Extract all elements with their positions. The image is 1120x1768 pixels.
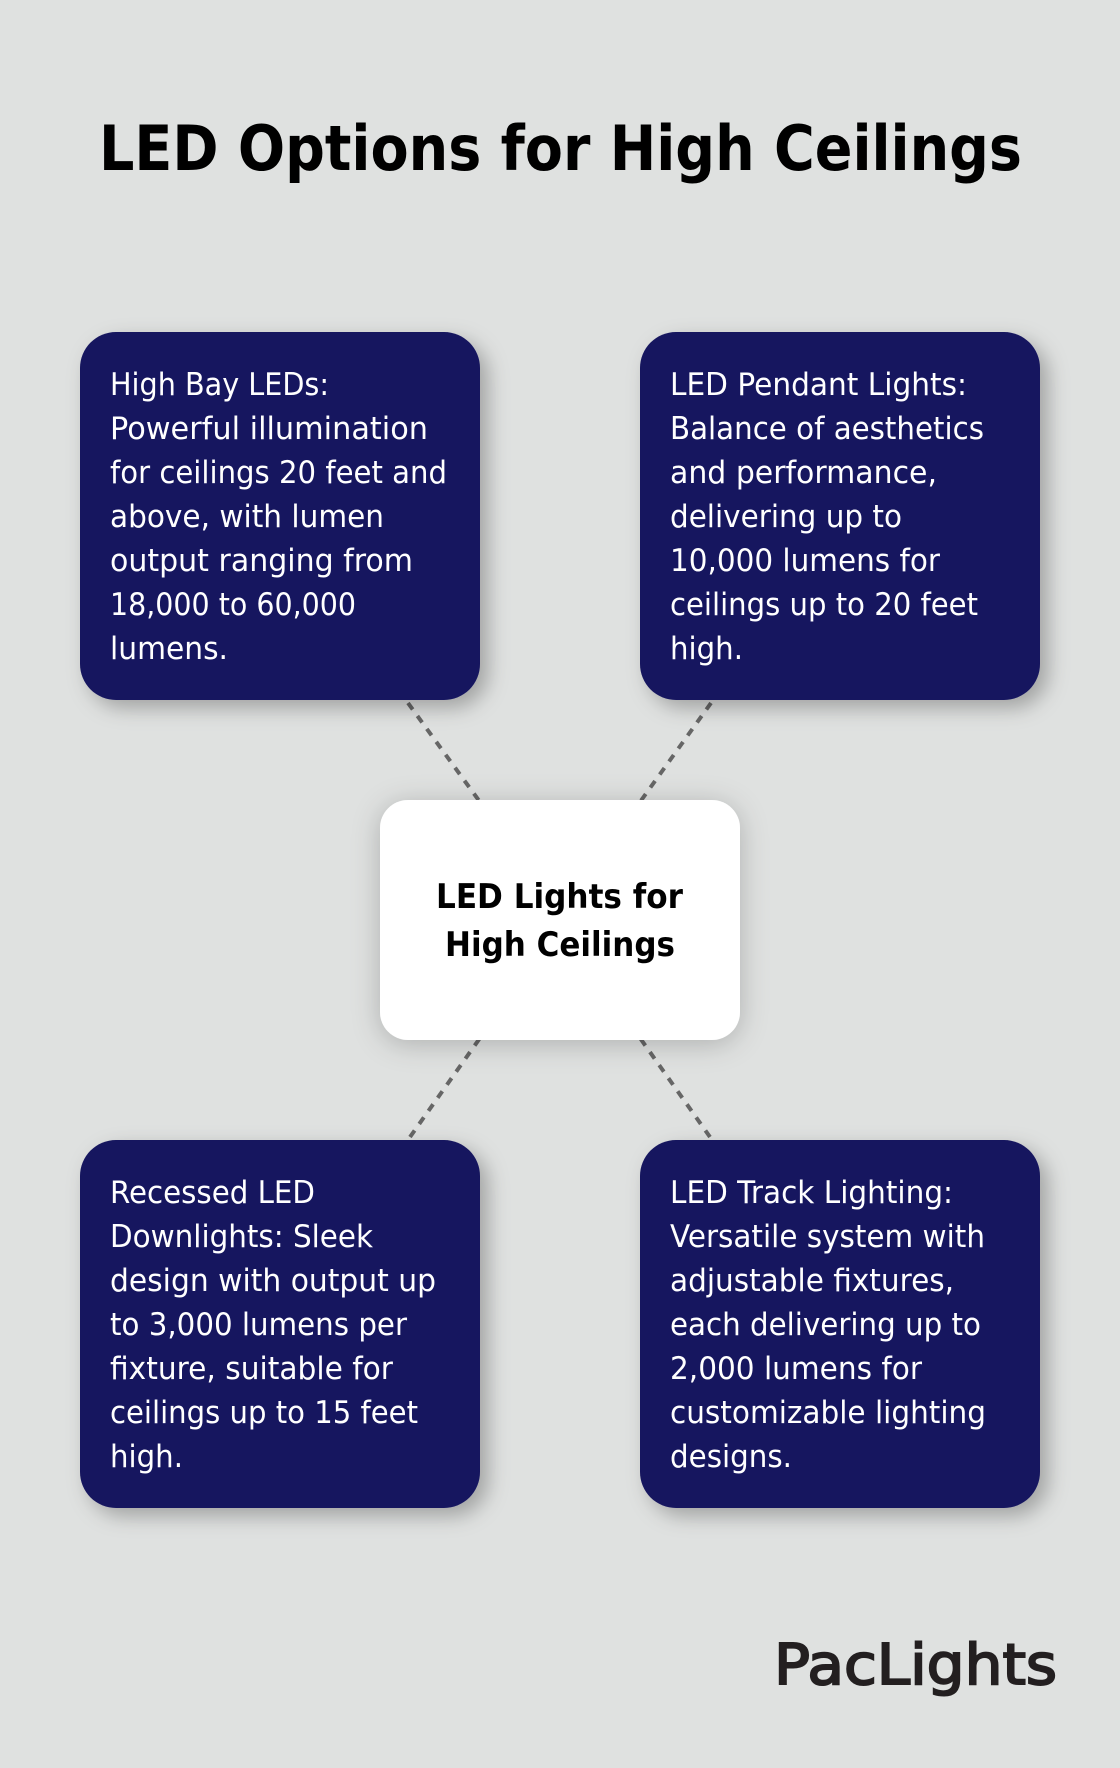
panel: High Bay LEDs: above, with lumen	[110, 499, 384, 535]
panel: LED Pendant Lights: 10,000 lumens for	[670, 543, 940, 579]
panel: LED Pendant Lights: Balance of aesthetics	[670, 411, 984, 447]
connector: bottom right	[640, 1038, 710, 1137]
panel: High Bay LEDs: High Bay LEDs:	[110, 367, 329, 403]
logo: PacLights: PacLights	[774, 1633, 1057, 1698]
panel: LED Pendant Lights	[640, 332, 1040, 700]
panel: High Bay LEDs: lumens.	[110, 631, 228, 667]
panel: LED Pendant Lights: LED Pendant Lights:	[670, 367, 967, 403]
panel: LED Track Lighting: each delivering up to	[670, 1307, 981, 1343]
panel: LED Track Lighting	[640, 1140, 1040, 1508]
panel: LED Track Lighting: LED Track Lighting:	[670, 1175, 953, 1211]
connector: top right	[640, 703, 711, 802]
panel: LED Track Lighting: designs.	[670, 1439, 792, 1475]
panel: center topic: High Ceilings	[445, 925, 675, 965]
panel: LED Track Lighting: customizable lighting	[670, 1395, 986, 1431]
panel: High Bay LEDs	[80, 332, 480, 700]
panel: LED Track Lighting: Versatile system with	[670, 1219, 985, 1255]
panel: High Bay LEDs: output ranging from	[110, 543, 413, 579]
panel: Recessed LED Downlights: design with output up	[110, 1263, 436, 1299]
panel: LED Pendant Lights: high.	[670, 631, 743, 667]
panel: Recessed LED Downlights: high.	[110, 1439, 183, 1475]
panel: center topic	[380, 800, 740, 1040]
connector: top left	[408, 703, 480, 802]
panel: center topic: LED Lights for	[436, 877, 683, 917]
panel: Recessed LED Downlights	[80, 1140, 480, 1508]
panel: High Bay LEDs: for ceilings 20 feet and	[110, 455, 447, 491]
panel: LED Track Lighting: 2,000 lumens for	[670, 1351, 922, 1387]
panel: LED Track Lighting: adjustable fixtures,	[670, 1263, 954, 1299]
panel: Recessed LED Downlights: Downlights: Sleek	[110, 1219, 373, 1255]
panel: High Bay LEDs: Powerful illumination	[110, 411, 428, 447]
panel: High Bay LEDs: 18,000 to 60,000	[110, 587, 356, 623]
connector: bottom left	[410, 1038, 480, 1137]
panel: Recessed LED Downlights: to 3,000 lumens per	[110, 1307, 407, 1343]
panel: LED Pendant Lights: delivering up to	[670, 499, 902, 535]
panel: Recessed LED Downlights: Recessed LED	[110, 1175, 315, 1211]
panel: LED Pendant Lights: ceilings up to 20 feet	[670, 587, 978, 623]
panel: LED Pendant Lights: and performance,	[670, 455, 937, 491]
panel: Recessed LED Downlights: ceilings up to 15 feet	[110, 1395, 418, 1431]
panel: Recessed LED Downlights: fixture, suitable for	[110, 1351, 393, 1387]
title: LED Options for High Ceilings	[99, 112, 1022, 185]
